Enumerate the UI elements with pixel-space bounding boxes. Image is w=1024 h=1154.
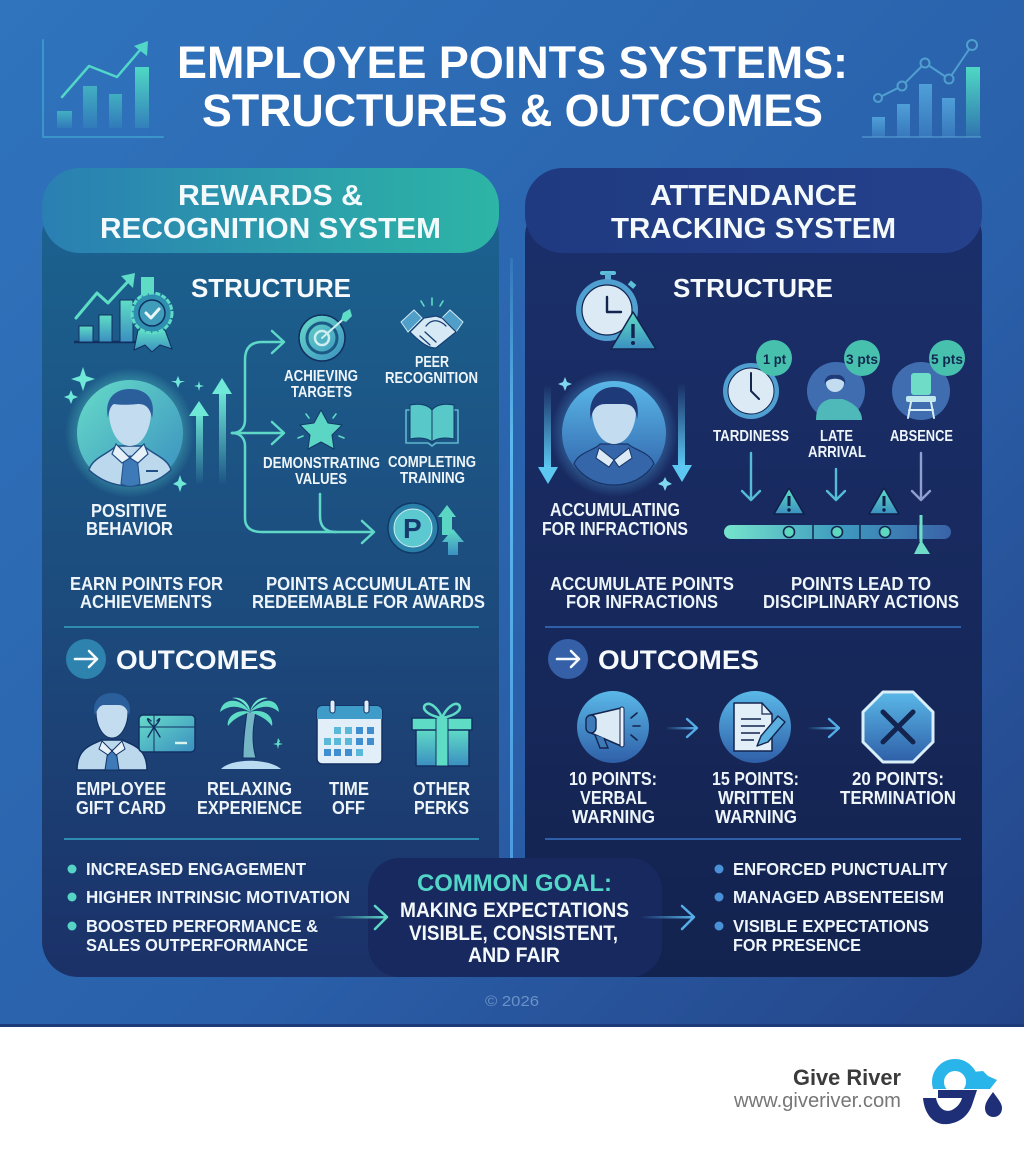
- list: attendance benefits: VISIBLE EXPECTATIONS: [733, 916, 929, 936]
- text: disciplinary actions: POINTS LEAD TO: [791, 574, 931, 594]
- icon: sparkles right: [558, 377, 672, 491]
- center divider line: [510, 258, 513, 860]
- text: earn points: EARN POINTS FOR: [70, 574, 223, 594]
- icon: calendar: [317, 700, 382, 764]
- text: positive behavior: BEHAVIOR: [86, 519, 173, 539]
- text: 15 points written warning: [712, 769, 799, 827]
- text: other perks: OTHER: [413, 779, 470, 799]
- panel header: attendance: ATTENDANCE: [650, 180, 857, 212]
- arrow: verbal to written: [665, 719, 697, 737]
- text: demonstrating values: VALUES: [295, 471, 347, 488]
- text: other perks: [413, 779, 470, 818]
- icon: stopwatch with warning: [576, 271, 656, 349]
- callout: common goal: VISIBLE, CONSISTENT,: [409, 922, 618, 945]
- panel header: attendance: TRACKING SYSTEM: [611, 213, 896, 245]
- text: late arrival: LATE: [820, 428, 853, 445]
- icon: late arrival 3 pts: 3 pts: [846, 351, 878, 367]
- icon: written document: [719, 691, 791, 763]
- text: relaxing experience: EXPERIENCE: [197, 798, 302, 818]
- icon: star: [298, 410, 344, 449]
- text: completing training: COMPLETING: [388, 454, 476, 471]
- text: time off: TIME: [329, 779, 369, 799]
- heading: outcomes with arrow: OUTCOMES: [116, 645, 277, 675]
- text: 10 points verbal warning: VERBAL: [580, 788, 647, 808]
- icon: palm island: [220, 698, 283, 769]
- arrows: downward: [538, 383, 692, 484]
- arrow: rewards to goal: [332, 906, 387, 929]
- text: points accumulate: POINTS ACCUMULATE IN: [266, 574, 471, 594]
- text: earn points: ACHIEVEMENTS: [80, 592, 212, 612]
- text: time off: OFF: [332, 798, 365, 818]
- panel header: rewards: RECOGNITION SYSTEM: [100, 213, 441, 245]
- icon: empty chair 5 pts: [892, 340, 965, 420]
- arrow: written to termination: [807, 719, 839, 737]
- panel: attendance tracking: [525, 168, 982, 977]
- icon: points coin: P: [403, 513, 422, 544]
- icon: termination stop sign: [863, 692, 933, 762]
- callout: common goal: AND FAIR: [468, 944, 560, 967]
- text: accumulate points: ACCUMULATE POINTS: [550, 574, 734, 594]
- text: employee gift card: GIFT CARD: [76, 798, 166, 818]
- icon: positive behaviour person: [65, 368, 195, 498]
- callout: common goal: MAKING EXPECTATIONS: [400, 899, 629, 922]
- icon: clock 1 pt: [723, 340, 792, 419]
- text: employee gift card: [76, 779, 166, 818]
- arrow: goal to attendance: [640, 906, 694, 929]
- list: attendance benefits: MANAGED ABSENTEEISM: [733, 887, 944, 907]
- brand text: www.giveriver.com: [733, 1090, 901, 1112]
- text: time off: [329, 779, 369, 818]
- text: 20 points termination: [840, 769, 956, 808]
- icon: employee gift card: [77, 693, 195, 770]
- callout: common goal: COMMON GOAL:: [417, 870, 612, 897]
- icon: Give River logo: [923, 1065, 1002, 1124]
- text: peer recognition: RECOGNITION: [385, 370, 478, 387]
- icon: megaphone: [577, 691, 649, 763]
- heading: structure: STRUCTURE: [191, 273, 351, 303]
- list: rewards benefits: [68, 859, 350, 955]
- text: demonstrating values: [263, 455, 380, 488]
- text: completing training: TRAINING: [400, 470, 465, 487]
- panel header: rewards: REWARDS &: [178, 180, 363, 212]
- heading: outcomes with arrow: [66, 639, 277, 679]
- text: points accumulate: [252, 574, 485, 612]
- chart: points timeline: [724, 515, 951, 554]
- icon: gift box: [412, 704, 472, 766]
- text: achieving targets: [284, 368, 358, 401]
- text: positive behavior: POSITIVE: [91, 501, 167, 521]
- text: 20 points termination: 20 POINTS:: [852, 769, 944, 789]
- text: 10 points verbal warning: 10 POINTS:: [569, 769, 657, 789]
- text: 15 points written warning: WARNING: [715, 807, 797, 827]
- text: late arrival: ARRIVAL: [808, 444, 866, 461]
- title: EMPLOYEE POINTS SYSTEMS:: [177, 37, 848, 88]
- text: relaxing experience: [197, 779, 302, 818]
- arrows: branching connectors: [232, 331, 374, 543]
- brand text: Give River: [793, 1065, 901, 1090]
- text: achieving targets: TARGETS: [291, 384, 352, 401]
- text: relaxing experience: RELAXING: [207, 779, 292, 799]
- text: achieving targets: ACHIEVING: [284, 368, 358, 385]
- icon: book: [406, 404, 458, 446]
- footer band: [0, 1027, 1024, 1154]
- icon: target: [299, 309, 352, 361]
- text: tardiness: TARDINESS: [713, 428, 789, 445]
- heading: structure: STRUCTURE: [673, 273, 833, 303]
- list: rewards benefits: SALES OUTPERFORMANCE: [86, 935, 308, 955]
- text: completing training: [388, 454, 476, 487]
- panel header: attendance: [525, 168, 982, 253]
- list: rewards benefits: BOOSTED PERFORMANCE &: [86, 916, 318, 936]
- copyright: © 2026: [485, 993, 539, 1010]
- text: 10 points verbal warning: [569, 769, 657, 827]
- icon: points coin: [388, 503, 464, 555]
- text: earn points: [70, 574, 223, 612]
- text: 15 points written warning: 15 POINTS:: [712, 769, 799, 789]
- text: disciplinary actions: DISCIPLINARY ACTIONS: [763, 592, 959, 612]
- text: points accumulate: REDEEMABLE FOR AWARDS: [252, 592, 485, 612]
- icon: right header chart: [862, 40, 981, 137]
- list: attendance benefits: [714, 859, 948, 955]
- icon: late arrival 3 pts: [807, 340, 880, 420]
- icon: clock 1 pt: 1 pt: [763, 351, 786, 367]
- text: accumulating for infractions: FOR INFRACTIONS: [542, 519, 688, 539]
- list: rewards benefits: HIGHER INTRINSIC MOTIVATION: [86, 887, 350, 907]
- title: [177, 37, 848, 136]
- text: peer recognition: [385, 354, 478, 387]
- text: employee gift card: EMPLOYEE: [76, 779, 166, 799]
- brand text: [733, 1065, 901, 1112]
- arrows: upward growth: [189, 378, 232, 485]
- list: attendance benefits: FOR PRESENCE: [733, 935, 861, 955]
- icon: chart and badge: [74, 273, 172, 352]
- text: disciplinary actions: [763, 574, 959, 612]
- arrows: infractions to timeline: [742, 453, 930, 500]
- text: accumulate points: FOR INFRACTIONS: [566, 592, 718, 612]
- text: peer recognition: PEER: [415, 354, 449, 371]
- callout: common goal: [368, 858, 662, 977]
- text: other perks: PERKS: [414, 798, 469, 818]
- text: late arrival: [808, 428, 866, 461]
- text: accumulating for infractions: [542, 500, 688, 539]
- list: rewards benefits: INCREASED ENGAGEMENT: [86, 859, 306, 879]
- heading: outcomes with arrow: [548, 639, 759, 679]
- text: positive behavior: [86, 501, 173, 539]
- icon: empty chair 5 pts: 5 pts: [931, 351, 963, 367]
- panel header: rewards: [42, 168, 499, 253]
- text: 15 points written warning: WRITTEN: [718, 788, 794, 808]
- text: 10 points verbal warning: WARNING: [572, 807, 655, 827]
- icon: warning triangles: [774, 488, 899, 514]
- text: absence: ABSENCE: [890, 428, 953, 445]
- text: accumulate points: [550, 574, 734, 612]
- text: accumulating for infractions: ACCUMULATING: [550, 500, 680, 520]
- icon: sparkles left: [64, 367, 204, 492]
- text: 20 points termination: TERMINATION: [840, 788, 956, 808]
- list: attendance benefits: ENFORCED PUNCTUALITY: [733, 859, 948, 879]
- title: STRUCTURES & OUTCOMES: [202, 85, 823, 136]
- icon: infractions person: [550, 369, 678, 497]
- text: demonstrating values: DEMONSTRATING: [263, 455, 380, 472]
- icon: left header chart: [43, 40, 163, 137]
- panel: rewards and recognition: [42, 168, 499, 977]
- heading: outcomes with arrow: OUTCOMES: [598, 645, 759, 675]
- icon: handshake: [401, 298, 463, 348]
